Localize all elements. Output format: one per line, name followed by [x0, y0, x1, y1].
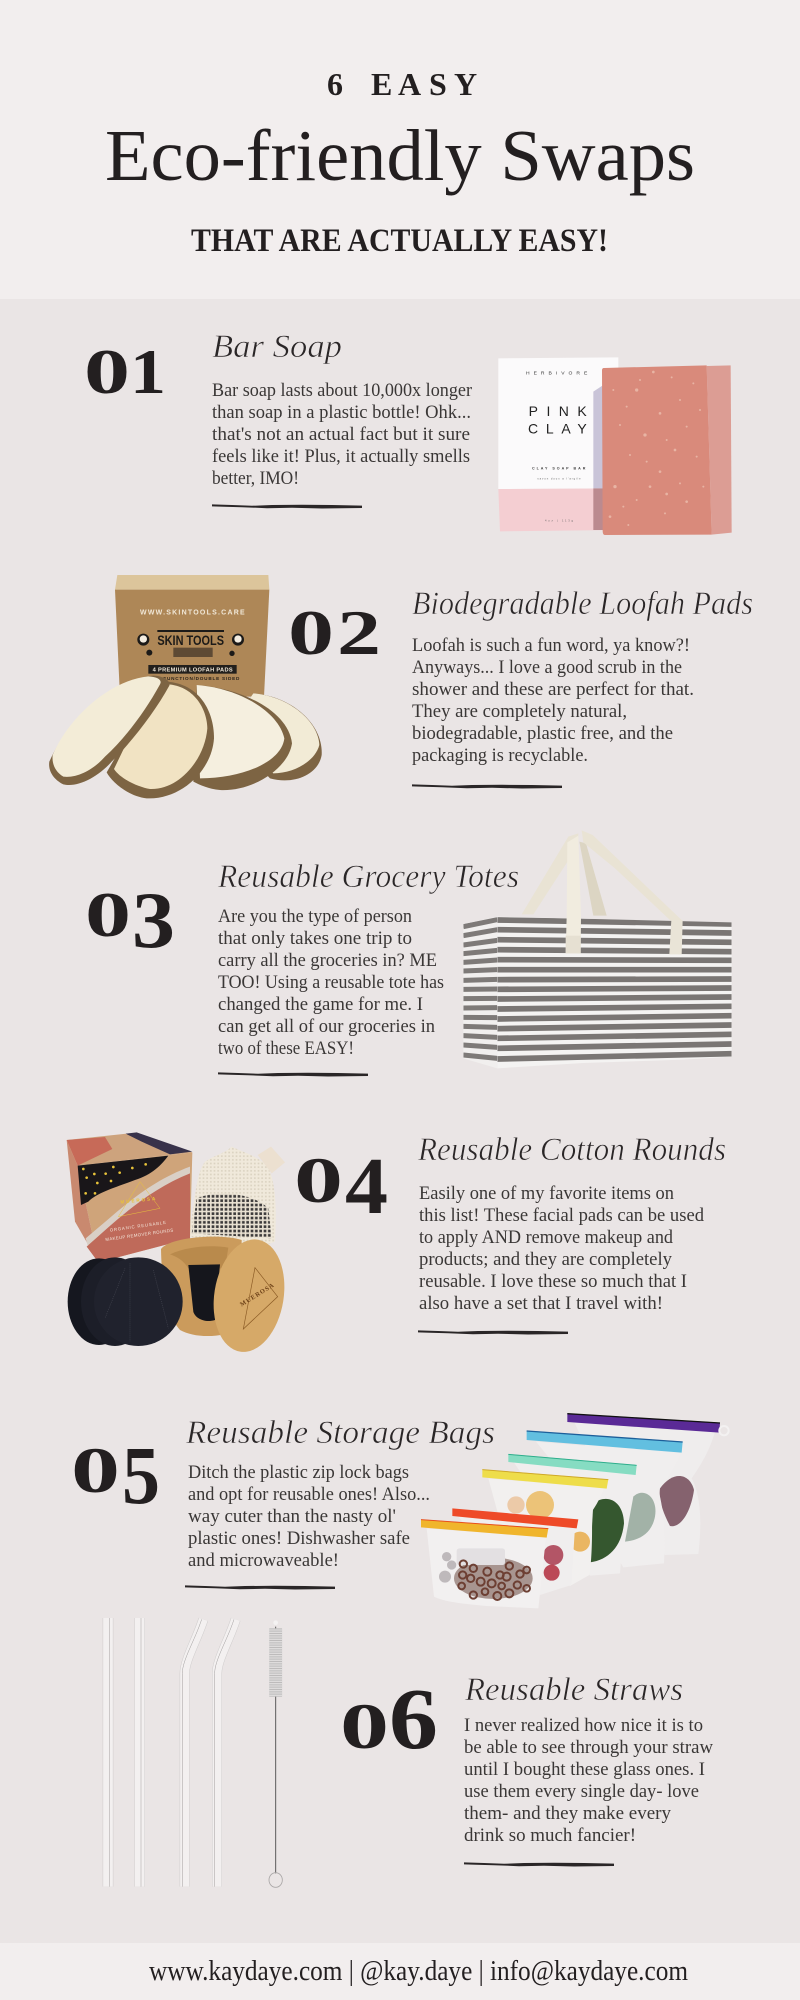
description [212, 381, 472, 489]
image: reusable cotton rounds set [67, 1132, 292, 1357]
description: Loofah is such a fun word, ya know?! [412, 636, 690, 656]
number 06: 6 [389, 1670, 438, 1767]
brush underline [412, 784, 562, 788]
description [419, 1184, 705, 1314]
description: that only takes one trip to [218, 929, 412, 949]
number 01 [84, 336, 166, 407]
image: loofah pads and box: WWW.SKINTOOLS.CARE [140, 609, 245, 616]
description: biodegradable, plastic free, and the [412, 724, 673, 744]
description: plastic ones! Dishwasher safe [188, 1529, 410, 1549]
brush underline [464, 1862, 614, 1866]
image: loofah pads and box [49, 575, 322, 798]
image: silicone storage bags [421, 1413, 729, 1608]
image: glass straws and cleaning brush [108, 1618, 282, 1887]
number 03: 0 [85, 879, 131, 950]
description: and microwaveable! [188, 1551, 339, 1571]
pad 4 [227, 693, 322, 780]
pad 3 [193, 685, 292, 790]
description: Ditch the plastic zip lock bags [188, 1463, 409, 1483]
description: this list! These facial pads can be used [419, 1206, 705, 1226]
number 02: 0 [288, 597, 334, 668]
image: loofah pads and box: 4 PREMIUM LOOFAH PADS [153, 667, 233, 673]
number 06: 0 [340, 1691, 389, 1763]
bamboo lid [206, 1234, 292, 1357]
pad 2 [107, 682, 214, 798]
section 01: bar soap [84, 329, 732, 535]
number 05 [71, 1429, 160, 1521]
orange bag [427, 1528, 546, 1608]
number 04: 0 [294, 1145, 343, 1217]
brush underline [185, 1585, 335, 1590]
item title: Bar Soap [212, 329, 342, 365]
bent straw 1 [182, 1619, 203, 1887]
image: pink clay soap [498, 357, 732, 535]
description [412, 636, 694, 766]
brush underline [218, 1072, 368, 1076]
description [464, 1716, 714, 1846]
bent straw 2 [215, 1619, 236, 1887]
number 06 [340, 1670, 438, 1767]
back straps [579, 842, 607, 916]
black rounds [68, 1258, 130, 1345]
description: also have a set that I travel with! [419, 1294, 663, 1314]
description: be able to see through your straw [464, 1738, 714, 1758]
box [67, 1133, 192, 1166]
description: packaging is recyclable. [412, 746, 588, 766]
description: changed the game for me. I [218, 995, 423, 1015]
item title: Reusable Straws [464, 1672, 683, 1708]
section 05: storage bags [71, 1413, 729, 1608]
side panel [463, 917, 497, 1068]
description: Are you the type of person [218, 907, 412, 927]
section 02: loofah pads [49, 575, 753, 798]
heading: 6 easy: 6 EASY [327, 66, 477, 102]
description: them- and they make every [464, 1804, 672, 1824]
number 05: 5 [122, 1429, 160, 1521]
image: pink clay soap: savon doux a l'argile [537, 476, 581, 480]
title: Eco-friendly Swaps [105, 115, 695, 196]
item title: Reusable Storage Bags [185, 1415, 495, 1451]
footer contact line: www.kaydaye.com | @kay.daye | info@kaydaye.com [149, 1955, 688, 1987]
image: reusable cotton rounds set: MUEROSA [239, 1282, 276, 1308]
number 05: 0 [71, 1435, 120, 1507]
number 01: 0 [84, 336, 130, 407]
brush underline [212, 504, 362, 508]
description: drink so much fancier! [464, 1826, 636, 1846]
description: until I bought these glass ones. I [464, 1760, 705, 1780]
number 02: 2 [337, 597, 381, 668]
footer background [0, 1943, 800, 2000]
description: that's not an actual fact but it sure [212, 425, 470, 445]
mesh bag [188, 1147, 276, 1247]
description: Anyways... I love a good scrub in the [412, 658, 682, 678]
front straps [566, 836, 581, 953]
number 04: 4 [345, 1141, 388, 1231]
image: pink clay soap: HERBIVORE [526, 371, 588, 377]
description [188, 1463, 430, 1571]
description: TOO! Using a reusable tote has [218, 973, 444, 993]
number 02 [288, 597, 381, 668]
number 03 [85, 877, 175, 965]
description: to apply AND remove makeup and [419, 1228, 674, 1248]
blue bag [536, 1442, 681, 1567]
brush underline [418, 1330, 568, 1334]
image: pink clay soap: CLAY [528, 420, 587, 436]
section 03: grocery totes [85, 830, 732, 1076]
item title: Biodegradable Loofah Pads [412, 586, 753, 622]
description: way cuter than the nasty ol' [188, 1507, 396, 1527]
red bag [458, 1517, 575, 1595]
section 04: cotton rounds [67, 1132, 726, 1357]
image: striped tote bag [463, 830, 732, 1068]
header background [0, 0, 800, 299]
section 06: reusable straws [108, 1618, 714, 1887]
description: Easily one of my favorite items on [419, 1184, 674, 1204]
yellow bag [488, 1478, 604, 1586]
number 04 [294, 1141, 388, 1231]
image: reusable cotton rounds set: ORGANIC REUSABLE [109, 1220, 166, 1233]
description: carry all the groceries in? ME [218, 951, 437, 971]
description: and opt for reusable ones! Also... [188, 1485, 430, 1505]
image: reusable cotton rounds set: MUEROSA [120, 1196, 156, 1205]
item title: Reusable Cotton Rounds [417, 1132, 726, 1168]
description: better, IMO! [212, 469, 299, 489]
image: pink clay soap: CLAY SOAP BAR [532, 467, 586, 471]
image: pink clay soap: PINK [529, 403, 587, 419]
description: They are completely natural, [412, 702, 627, 722]
description: Bar soap lasts about 10,000x longer [212, 381, 472, 401]
green bag [513, 1462, 634, 1576]
pad 1 [49, 676, 170, 785]
straight straw 1 [108, 1618, 109, 1887]
description: I never realized how nice it is to [464, 1716, 703, 1736]
number 03: 3 [132, 877, 175, 965]
description: products; and they are completely [419, 1250, 673, 1270]
bamboo holder [161, 1237, 242, 1336]
description [218, 907, 444, 1059]
description: use them every single day- love [464, 1782, 699, 1802]
description: shower and these are perfect for that. [412, 680, 694, 700]
description: can get all of our groceries in [218, 1017, 435, 1037]
description: two of these EASY! [218, 1039, 354, 1059]
description: reusable. I love these so much that I [419, 1272, 687, 1292]
description: feels like it! Plus, it actually smells [212, 447, 470, 467]
purple bag [573, 1420, 715, 1555]
image: loofah pads and box: FUNCTION/DOUBLE SIDED [163, 676, 240, 681]
image: pink clay soap: 4oz | 113g [545, 519, 574, 523]
item title: Reusable Grocery Totes [217, 859, 519, 895]
straight straw 2 [140, 1618, 141, 1887]
image: reusable cotton rounds set: MAKEUP REMOVER ROUNDS [105, 1228, 174, 1242]
cleaning brush [269, 1620, 282, 1887]
front panel [497, 917, 732, 1068]
subtitle: THAT ARE ACTUALLY EASY! [191, 223, 608, 259]
number 01: 1 [130, 336, 166, 407]
image: loofah pads and box: SKIN TOOLS [157, 632, 224, 648]
description: than soap in a plastic bottle! Ohk... [212, 403, 471, 423]
